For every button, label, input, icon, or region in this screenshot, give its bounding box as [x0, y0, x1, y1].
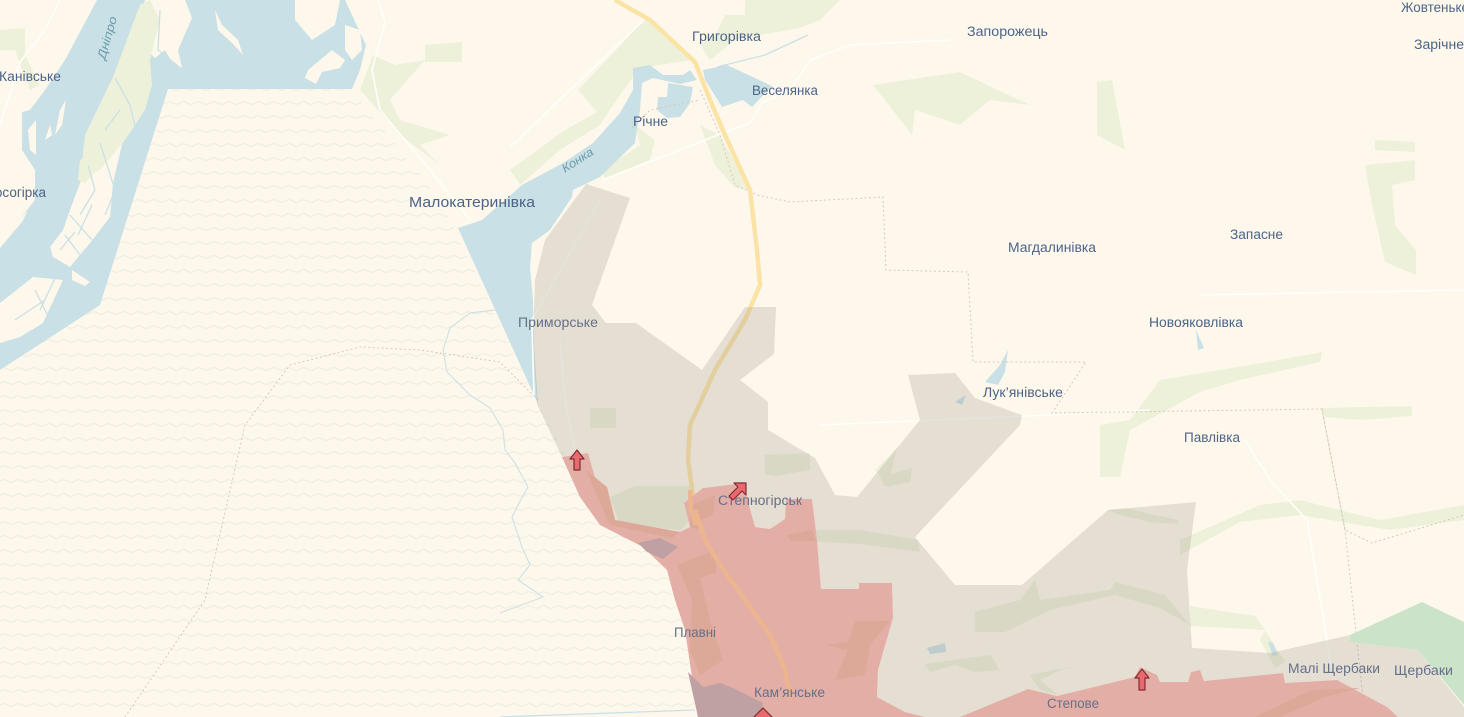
settlement labels: Запасне: [1230, 227, 1283, 242]
river island vegetation: [78, 0, 160, 183]
settlement labels: Плавні: [674, 625, 716, 640]
area: contested grey zone: [533, 184, 1464, 717]
settlement labels: Канівське: [0, 69, 61, 84]
flood zone wave pattern: [0, 89, 698, 717]
river name: Dnipro: Дніпро: [94, 14, 120, 63]
settlement labels: Малокатеринівка: [409, 194, 536, 211]
rivers in flood zone: [443, 308, 543, 613]
settlement labels: Лук’янівське: [983, 385, 1063, 400]
settlement labels: Павлівка: [1184, 430, 1240, 445]
vegetation inside the red zone: [586, 470, 1360, 717]
river name: Konka: Конка: [559, 145, 596, 176]
settlement labels: Магдалинівка: [1008, 240, 1096, 255]
delta channels: [15, 10, 808, 717]
area: occupied red zone: [562, 453, 1398, 717]
reservoir and river water: [0, 0, 1278, 656]
marker: battle diamond at Kamianske: [753, 708, 773, 717]
arrow: advance north near Prymorske: [570, 450, 584, 470]
flood zone of the drained reservoir: [0, 89, 698, 717]
arrow: advance north-east at Stepnohirsk: [729, 483, 746, 500]
settlement labels: Щербаки: [1394, 663, 1453, 678]
river Dnipro islands: [0, 0, 362, 343]
settlement labels: Річне: [633, 114, 668, 129]
settlement labels: Кам’янське: [754, 685, 825, 700]
settlement labels: Степове: [1047, 696, 1099, 711]
boundary dotted lines: [125, 90, 1464, 717]
settlement labels: Зарічне: [1414, 37, 1464, 52]
flooded dark lake: [638, 538, 678, 559]
dark lower water area: [688, 672, 763, 717]
highway: [615, 0, 790, 700]
settlement labels: Новояковлівка: [1149, 315, 1243, 330]
arrow: advance north near Stepove: [1135, 669, 1149, 690]
settlement labels: Малі Щербаки: [1288, 661, 1380, 676]
settlement labels: Приморське: [518, 315, 598, 330]
settlement labels: Запорожець: [967, 24, 1048, 39]
settlement labels: Григорівка: [692, 29, 762, 44]
highway section at Stepnohirsk: [690, 490, 696, 525]
area: green liberated zone: [1350, 602, 1464, 705]
highway through occupied zone: [695, 510, 790, 700]
settlement labels: Веселянка: [752, 83, 818, 98]
settlement labels: Степногірськ: [718, 493, 802, 508]
